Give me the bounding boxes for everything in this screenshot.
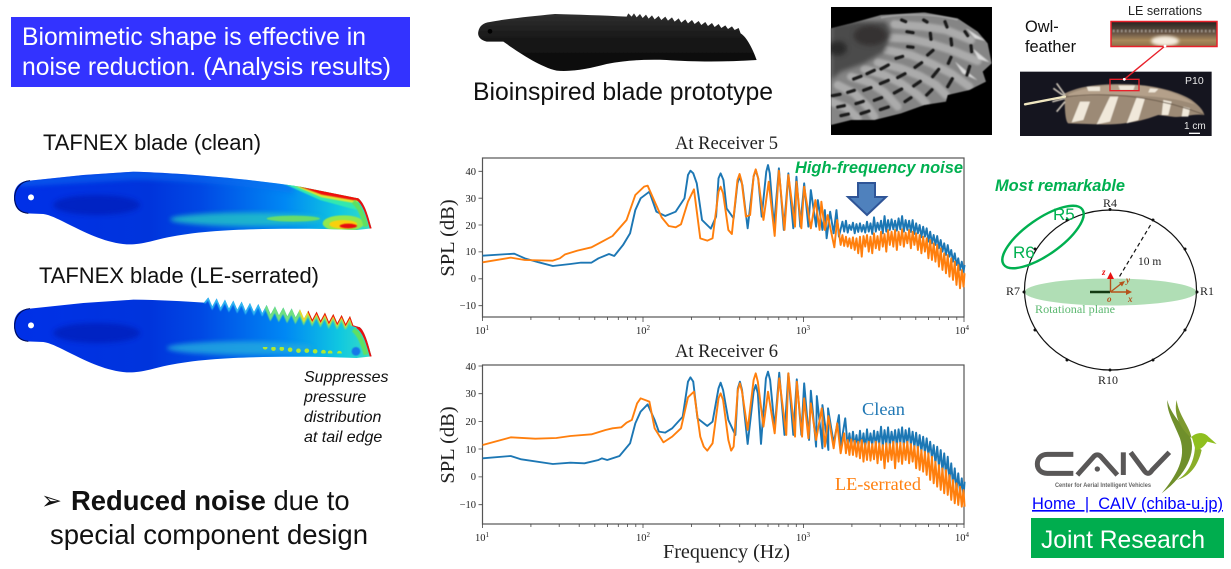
axis letters: x bbox=[1127, 294, 1133, 304]
label: owl feather bbox=[1025, 18, 1077, 56]
feather labels bbox=[1184, 75, 1206, 132]
feather labels: 1 cm bbox=[1184, 121, 1206, 132]
y tick labels bbox=[460, 167, 476, 312]
axis arrows bbox=[1107, 272, 1132, 295]
x tick labels: 10 bbox=[475, 326, 486, 337]
axis ticks bbox=[478, 171, 964, 322]
photo: bioinspired blade prototype bbox=[478, 13, 757, 71]
axis letters: y bbox=[1125, 275, 1131, 285]
label: LE serrations: LE serrations bbox=[1128, 4, 1202, 18]
label: owl feather: Owl- bbox=[1025, 18, 1059, 36]
annotation: pressure distribution: Suppresses bbox=[304, 369, 388, 386]
heading: most remarkable: Most remarkable bbox=[995, 176, 1125, 195]
receiver labels: R1 bbox=[1200, 284, 1214, 298]
y tick labels: 10 bbox=[466, 445, 476, 456]
x tick labels: 2 bbox=[646, 324, 650, 332]
orange curve: LE-serrated bbox=[483, 169, 965, 288]
photo: owl wing bbox=[828, 5, 992, 135]
link: CAIV home: Home | CAIV (chiba-u.jp) bbox=[1032, 495, 1223, 513]
conclusion text: Reduced noise due to bbox=[71, 485, 350, 516]
receiver circle bbox=[1024, 210, 1196, 370]
bird mark bbox=[1162, 400, 1217, 493]
badge: joint research bbox=[1031, 518, 1224, 558]
title banner: noise reduction. (Analysis results) bbox=[22, 54, 391, 81]
x axis label: Frequency (Hz) bbox=[663, 541, 790, 563]
x tick labels: 10 bbox=[636, 533, 646, 544]
y tick labels: 20 bbox=[466, 221, 476, 232]
axis letters bbox=[1101, 267, 1133, 304]
receiver labels bbox=[1006, 196, 1214, 387]
x tick labels: 2 bbox=[646, 531, 650, 539]
legend label: clean: Clean bbox=[862, 399, 905, 419]
title banner: Biomimetic shape is effective in bbox=[22, 24, 366, 51]
x tick labels bbox=[475, 531, 970, 544]
label: owl feather: feather bbox=[1025, 38, 1077, 56]
x tick labels: 3 bbox=[806, 324, 810, 332]
y tick labels: −10 bbox=[460, 500, 476, 511]
connector: feather to inset bbox=[1123, 45, 1166, 81]
axis letters: o bbox=[1107, 294, 1112, 304]
feather labels: P10 bbox=[1185, 75, 1204, 87]
y tick labels: 40 bbox=[466, 167, 476, 178]
logo: CAIV bbox=[1037, 400, 1217, 493]
receiver labels: R7 bbox=[1006, 284, 1020, 298]
receiver labels: R10 bbox=[1098, 373, 1118, 387]
y tick labels: 20 bbox=[466, 417, 476, 428]
receiver points bbox=[1022, 208, 1198, 372]
axis letters: z bbox=[1101, 267, 1106, 277]
x tick labels: 10 bbox=[636, 326, 646, 337]
x tick labels: 10 bbox=[955, 326, 966, 337]
callout: high-frequency noise: High-frequency noise bbox=[795, 159, 963, 177]
chart title: receiver 6: At Receiver 6 bbox=[675, 342, 778, 362]
y tick labels: 10 bbox=[466, 247, 476, 258]
heading: clean blade: TAFNEX blade (clean) bbox=[43, 130, 261, 155]
arrow: high-frequency noise bbox=[848, 183, 886, 215]
highlighted receivers: R5 bbox=[1053, 205, 1075, 224]
conclusion text bbox=[41, 485, 368, 550]
logo subtitle: Center for Aerial Intelligent Vehicles bbox=[1055, 482, 1151, 489]
y axis label: receiver 6: SPL (dB) bbox=[437, 406, 459, 484]
highlighted receivers bbox=[1013, 205, 1075, 262]
chart title: receiver 5: At Receiver 5 bbox=[675, 134, 778, 154]
x tick labels: 10 bbox=[475, 533, 486, 544]
inset: serrations close-up bbox=[1111, 22, 1217, 46]
x tick labels bbox=[475, 324, 970, 337]
highlighted oval bbox=[993, 195, 1093, 279]
highlighted receivers: R6 bbox=[1013, 243, 1035, 262]
x tick labels: 10 bbox=[796, 533, 806, 544]
annotation: pressure distribution bbox=[303, 369, 388, 446]
logo letters bbox=[1037, 452, 1169, 475]
conclusion text: ➢ bbox=[41, 486, 62, 515]
y tick labels bbox=[460, 362, 476, 511]
legend label: LE-serrated: LE-serrated bbox=[835, 474, 921, 494]
x tick labels: 1 bbox=[486, 324, 490, 332]
y tick labels: 0 bbox=[471, 472, 476, 483]
x tick labels: 10 bbox=[796, 326, 806, 337]
distance label: 10 m bbox=[1138, 256, 1161, 268]
radius line bbox=[1118, 225, 1150, 279]
blue curve: clean bbox=[483, 165, 965, 272]
axis ticks bbox=[478, 366, 964, 528]
y axis label: receiver 5: SPL (dB) bbox=[437, 199, 459, 277]
photo: owl feather bbox=[1020, 72, 1212, 136]
title banner bbox=[11, 17, 410, 87]
blade in plane bbox=[1090, 291, 1110, 293]
x tick labels: 3 bbox=[806, 531, 810, 539]
x tick labels: 10 bbox=[955, 533, 966, 544]
y tick labels: −10 bbox=[460, 301, 476, 312]
x tick labels: 4 bbox=[966, 324, 970, 332]
plane label: Rotational plane bbox=[1035, 302, 1115, 316]
caption: prototype: Bioinspired blade prototype bbox=[473, 79, 773, 106]
receiver labels: R4 bbox=[1103, 196, 1117, 210]
blade heatmap: LE-serrated bbox=[14, 298, 372, 372]
heading: LE-serrated blade: TAFNEX blade (LE-serrated) bbox=[39, 263, 319, 288]
y tick labels: 30 bbox=[466, 194, 476, 205]
annotation: pressure distribution: distribution bbox=[304, 409, 381, 426]
annotation: pressure distribution: pressure bbox=[303, 389, 366, 406]
badge: joint research: Joint Research bbox=[1041, 527, 1205, 554]
y tick labels: 40 bbox=[466, 362, 476, 373]
blade heatmap: clean bbox=[14, 172, 372, 244]
chart: SPL at receiver 6 bbox=[460, 362, 970, 544]
y tick labels: 0 bbox=[471, 274, 476, 285]
annotation: pressure distribution: at tail edge bbox=[304, 429, 382, 446]
chart: SPL at receiver 5 bbox=[460, 158, 970, 337]
x tick labels: 4 bbox=[966, 531, 970, 539]
blue curve: clean bbox=[483, 372, 965, 497]
orange curve: LE-serrated bbox=[483, 373, 965, 507]
y tick labels: 30 bbox=[466, 389, 476, 400]
conclusion text: special component design bbox=[50, 519, 368, 550]
rotational plane bbox=[1024, 278, 1196, 306]
x tick labels: 1 bbox=[486, 531, 490, 539]
diagram: receiver sphere bbox=[993, 195, 1214, 387]
